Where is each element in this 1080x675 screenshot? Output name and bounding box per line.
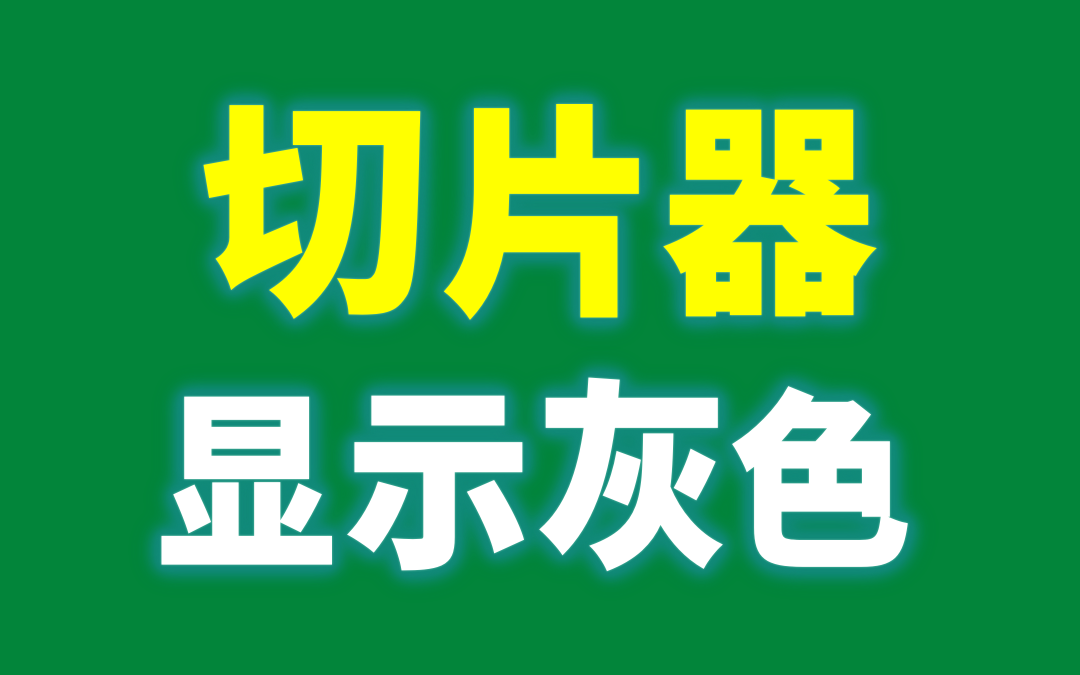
subtitle: shows gray: 灰: [537, 369, 727, 592]
title: slicer: 切: [201, 85, 429, 343]
title: slicer: [186, 85, 890, 343]
title: slicer: 器: [662, 90, 876, 342]
title: slicer: 片: [442, 93, 660, 343]
subtitle: shows gray: 显: [158, 380, 335, 595]
subtitle: shows gray: 色: [730, 380, 912, 592]
subtitle: shows gray: [142, 360, 925, 595]
subtitle: shows gray: 示: [346, 376, 530, 592]
